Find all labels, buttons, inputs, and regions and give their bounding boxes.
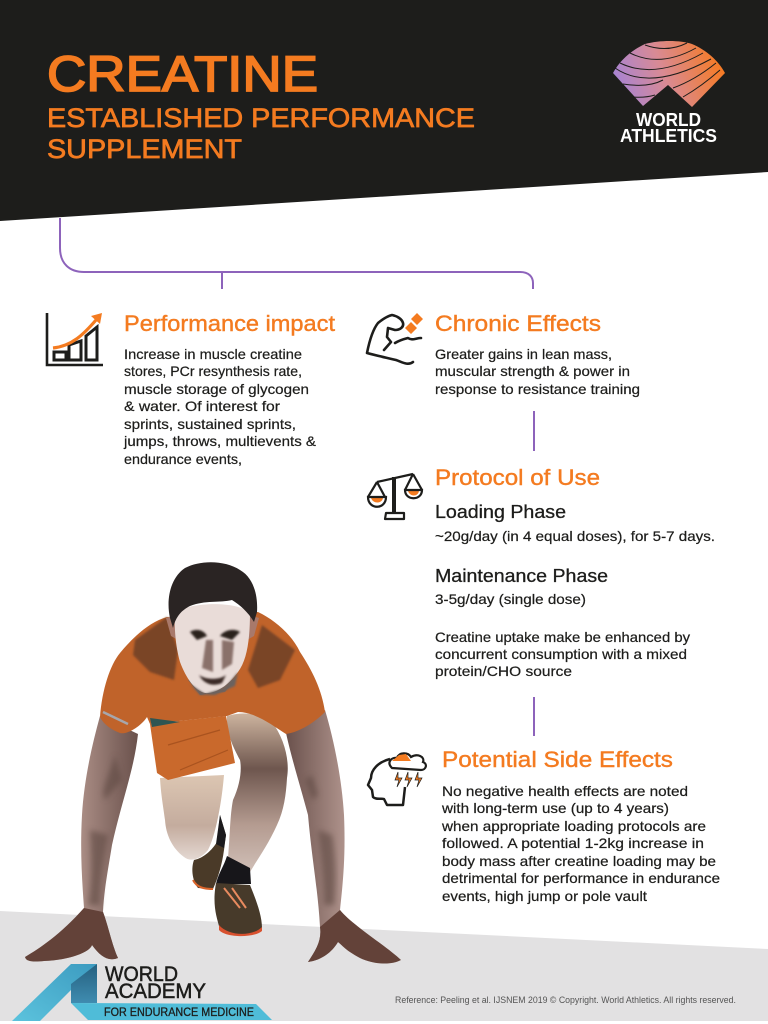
text: maintenance dose: 3-5g/day (single dose) — [435, 591, 586, 607]
hair — [169, 562, 257, 628]
neck — [188, 680, 235, 695]
icon: balance scale — [368, 474, 422, 519]
text: side effects body: when appropriate loading protocols are — [441, 818, 706, 834]
panel: potential side effects — [368, 747, 720, 904]
subtitle — [47, 103, 475, 164]
World Athletics logo: WORLD — [636, 110, 701, 130]
athlete illustration — [25, 562, 401, 964]
face shading — [190, 630, 240, 695]
text: performance impact body: & water. Of interest for — [124, 398, 280, 414]
icon: flexed muscle — [367, 313, 423, 364]
text: side effects body: body mass after creatine loading may be — [442, 853, 716, 869]
subtitle: SUPPLEMENT — [47, 134, 242, 164]
rear leg — [160, 775, 224, 860]
text: chronic effects body: response to resistance training — [435, 381, 640, 397]
purple connector lines — [60, 218, 534, 736]
icon: rising bar chart — [47, 313, 103, 365]
front sock — [216, 856, 251, 884]
right arm shading and hand — [305, 775, 335, 905]
text: chronic effects body — [435, 346, 640, 397]
World Athletics logo: ATHLETICS — [620, 126, 717, 146]
face — [175, 604, 250, 693]
text: side effects body: events, high jump or pole vault — [442, 888, 647, 904]
World Athletics logo — [613, 41, 725, 146]
subtitle: ESTABLISHED PERFORMANCE — [47, 103, 475, 133]
text: performance impact body: sprints, sustained sprints, — [124, 416, 296, 432]
text: side effects body: followed. A potential 1-2kg increase in — [442, 835, 704, 851]
World Academy logo: ACADEMY — [105, 980, 206, 1003]
shirt — [100, 612, 325, 734]
text: loading dose: ~20g/day (in 4 equal doses), for 5-7 days. — [435, 528, 715, 544]
text: uptake note: concurrent consumption with a mixed — [435, 646, 687, 662]
text: chronic effects body: muscular strength & power in — [435, 363, 630, 379]
text: side effects body: with long-term use (up to 4 years) — [441, 800, 669, 816]
text: side effects body: detrimental for performance in endurance — [442, 870, 720, 886]
subheading: maintenance phase: Maintenance Phase — [435, 566, 608, 586]
World Academy logo: WORLD — [105, 963, 178, 986]
shirt shading — [133, 617, 295, 688]
text: side effects body: No negative health effects are noted — [442, 783, 688, 799]
text: performance impact body: endurance events, — [124, 451, 242, 467]
subheading: loading phase: Loading Phase — [435, 502, 566, 522]
text: performance impact body: Increase in muscle creatine — [124, 346, 302, 362]
reference footer: Reference: Peeling et al. IJSNEM 2019 © Copyright. World Athletics. All rights reserved. — [395, 995, 736, 1005]
panel: protocol of use — [368, 465, 715, 679]
text: performance impact body: stores, PCr resynthesis rate, — [124, 363, 302, 379]
text: uptake note: Creatine uptake make be enhanced by — [435, 629, 690, 645]
left arm — [25, 716, 138, 962]
left arm shading and hand — [88, 755, 122, 905]
ears — [166, 615, 259, 640]
front shoe — [214, 883, 262, 935]
rear shoe — [192, 815, 226, 889]
front leg — [227, 714, 288, 872]
World Academy logo — [12, 963, 272, 1021]
header banner — [0, 0, 768, 221]
right arm — [286, 710, 401, 964]
text: uptake note — [435, 629, 690, 679]
text: chronic effects body: Greater gains in lean mass, — [435, 346, 612, 362]
text: performance impact body: muscle storage of glycogen — [124, 381, 309, 397]
text: performance impact body: jumps, throws, multievents & — [123, 433, 317, 449]
footer grey band — [0, 911, 768, 1021]
text: performance impact body — [123, 346, 317, 467]
heading: chronic effects: Chronic Effects — [435, 311, 601, 336]
shorts — [150, 716, 235, 780]
panel: chronic effects — [367, 311, 640, 397]
panel: performance impact — [47, 311, 335, 467]
World Academy logo: FOR ENDURANCE MEDICINE — [104, 1005, 254, 1019]
icon: head with storm cloud — [368, 753, 426, 805]
text: side effects body — [441, 783, 720, 904]
heading: protocol of use: Protocol of Use — [435, 465, 600, 490]
title: CREATINE — [47, 46, 318, 102]
heading: performance impact: Performance impact — [124, 311, 335, 336]
text: uptake note: protein/CHO source — [435, 663, 572, 679]
heading: potential side effects: Potential Side Effects — [442, 747, 673, 772]
